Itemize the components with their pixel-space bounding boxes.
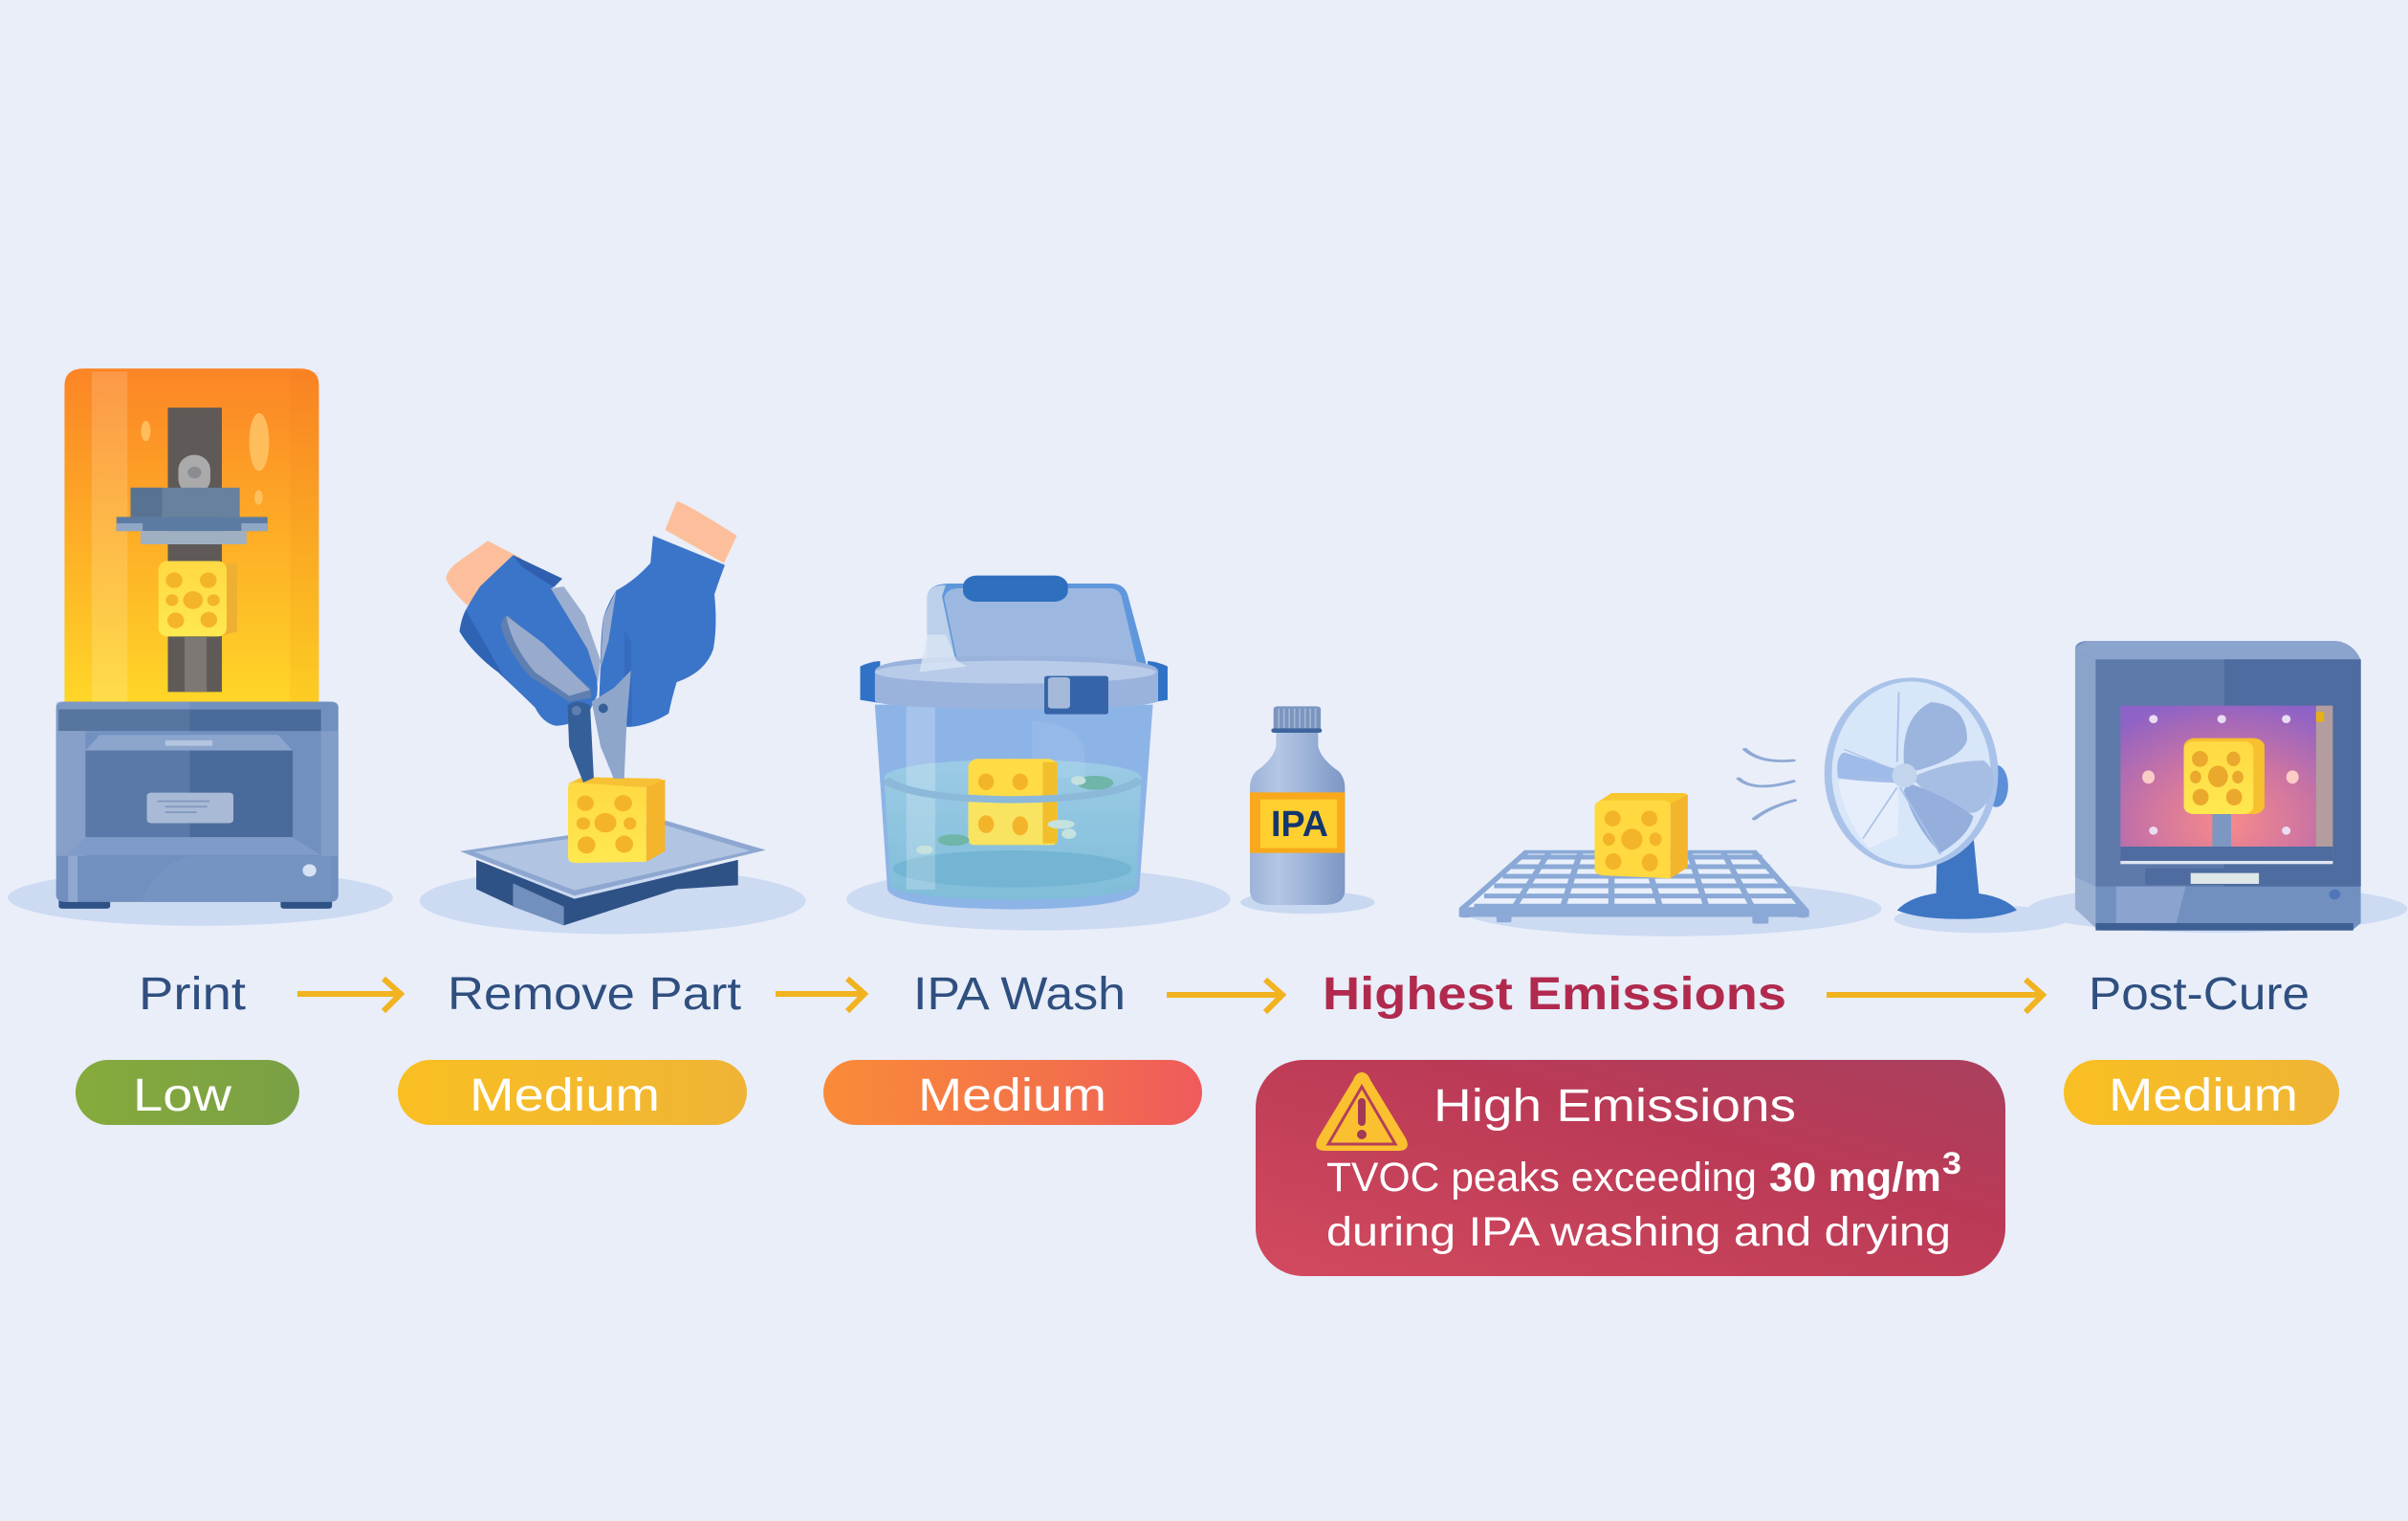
callout body text: 30 mg/m xyxy=(1769,1155,1941,1201)
bottle label text: IPA xyxy=(1271,805,1328,845)
chamber housing xyxy=(2075,641,2361,931)
step label: IPA Wash: IPA Wash xyxy=(913,969,1126,1020)
callout body text: during IPA washing and drying xyxy=(1326,1209,1951,1255)
icon: drying rack with part xyxy=(1459,749,1881,937)
arrow: IPA wash to highest emissions xyxy=(1167,980,1282,1012)
arrow: print to remove part xyxy=(297,979,401,1011)
badge: Medium (IPA wash) xyxy=(823,1060,1202,1125)
bucket rim and clasp xyxy=(860,634,1168,715)
badge: Low xyxy=(76,1060,299,1125)
residue in water xyxy=(916,776,1113,854)
arrow: highest emissions to post-cure xyxy=(1827,980,2043,1012)
fan blades xyxy=(1837,692,1994,854)
drying part xyxy=(1594,793,1688,878)
printed part on build plate xyxy=(159,562,237,636)
submerged part xyxy=(886,759,1141,845)
callout: high emissions xyxy=(1256,1060,2005,1276)
build plate xyxy=(460,821,766,925)
step label: Highest Emissions: Highest Emissions xyxy=(1323,969,1786,1020)
callout body text: TVOC peaks exceeding xyxy=(1326,1155,1757,1201)
icon: gloved hands removing part with pliers xyxy=(420,501,805,934)
right hand xyxy=(598,501,737,727)
printed part xyxy=(568,777,665,863)
step label: Post-Cure: Post-Cure xyxy=(2089,969,2309,1020)
badge: Low: Low xyxy=(133,1070,231,1121)
badge: Medium (remove part) xyxy=(398,1060,747,1125)
callout body text xyxy=(1326,1146,1961,1255)
icon: resin printer xyxy=(8,368,393,926)
arrow: remove part to IPA wash xyxy=(776,979,865,1011)
printer resin tank xyxy=(64,368,318,702)
curing part xyxy=(2184,738,2265,814)
badge: Medium (IPA wash): Medium xyxy=(918,1070,1106,1121)
left hand xyxy=(446,540,598,726)
bucket lid xyxy=(928,576,1147,665)
badge: Medium (remove part): Medium xyxy=(470,1070,660,1121)
step label: Remove Part: Remove Part xyxy=(448,969,741,1020)
callout heading: High Emissions xyxy=(1434,1081,1796,1132)
icon: warning triangle xyxy=(1316,1072,1408,1151)
icon: desk fan xyxy=(1828,679,2068,933)
printer base xyxy=(56,702,339,909)
step label: Print: Print xyxy=(139,969,246,1020)
icon: IPA wash bucket xyxy=(846,576,1231,931)
icon: IPA bottle xyxy=(1240,706,1375,914)
rack grid xyxy=(1460,852,1807,924)
bucket body xyxy=(875,676,1153,910)
callout body text: 3 xyxy=(1942,1146,1961,1180)
badge: Medium (post-cure) xyxy=(2064,1060,2339,1125)
badge: Medium (post-cure): Medium xyxy=(2109,1070,2298,1121)
pliers xyxy=(501,586,631,783)
chamber window xyxy=(2120,706,2332,885)
icon: UV post-cure chamber xyxy=(2028,641,2407,933)
air flow lines xyxy=(1739,749,1795,819)
